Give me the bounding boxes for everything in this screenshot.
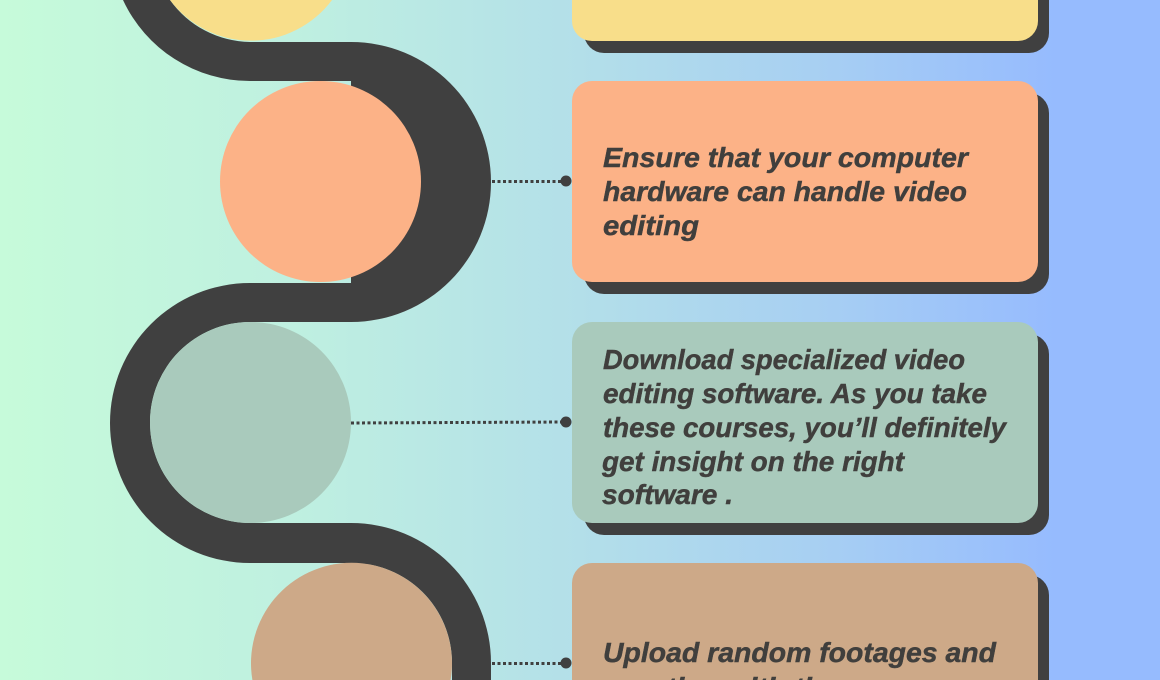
connector: tan xyxy=(492,658,572,668)
text: software step: editing software. As you take xyxy=(603,378,987,409)
winding path xyxy=(110,0,491,680)
panel: hardware step xyxy=(572,81,1049,294)
text: hardware step xyxy=(603,142,970,241)
text: software step: get insight on the right xyxy=(601,446,906,477)
panel: yellow card xyxy=(572,0,1049,53)
circle: yellow xyxy=(170,0,332,41)
text: software step xyxy=(601,344,1007,510)
circle: tan xyxy=(251,563,452,680)
text: hardware step: editing xyxy=(603,210,699,241)
text: software step: these courses, you’ll definitely xyxy=(603,412,1007,443)
connector: sage green xyxy=(351,416,572,428)
text: software step: software . xyxy=(602,479,733,510)
panel: software step xyxy=(572,322,1049,535)
circle: orange xyxy=(220,81,421,282)
text: hardware step: Ensure that your computer xyxy=(603,142,970,173)
text: software step: Download specialized video xyxy=(603,344,965,375)
circle: sage green xyxy=(150,322,351,523)
connector: orange xyxy=(492,176,572,186)
text: hardware step: hardware can handle video xyxy=(603,176,967,207)
text: upload step: Upload random footages and xyxy=(603,637,997,668)
panel: upload step xyxy=(572,563,1049,680)
